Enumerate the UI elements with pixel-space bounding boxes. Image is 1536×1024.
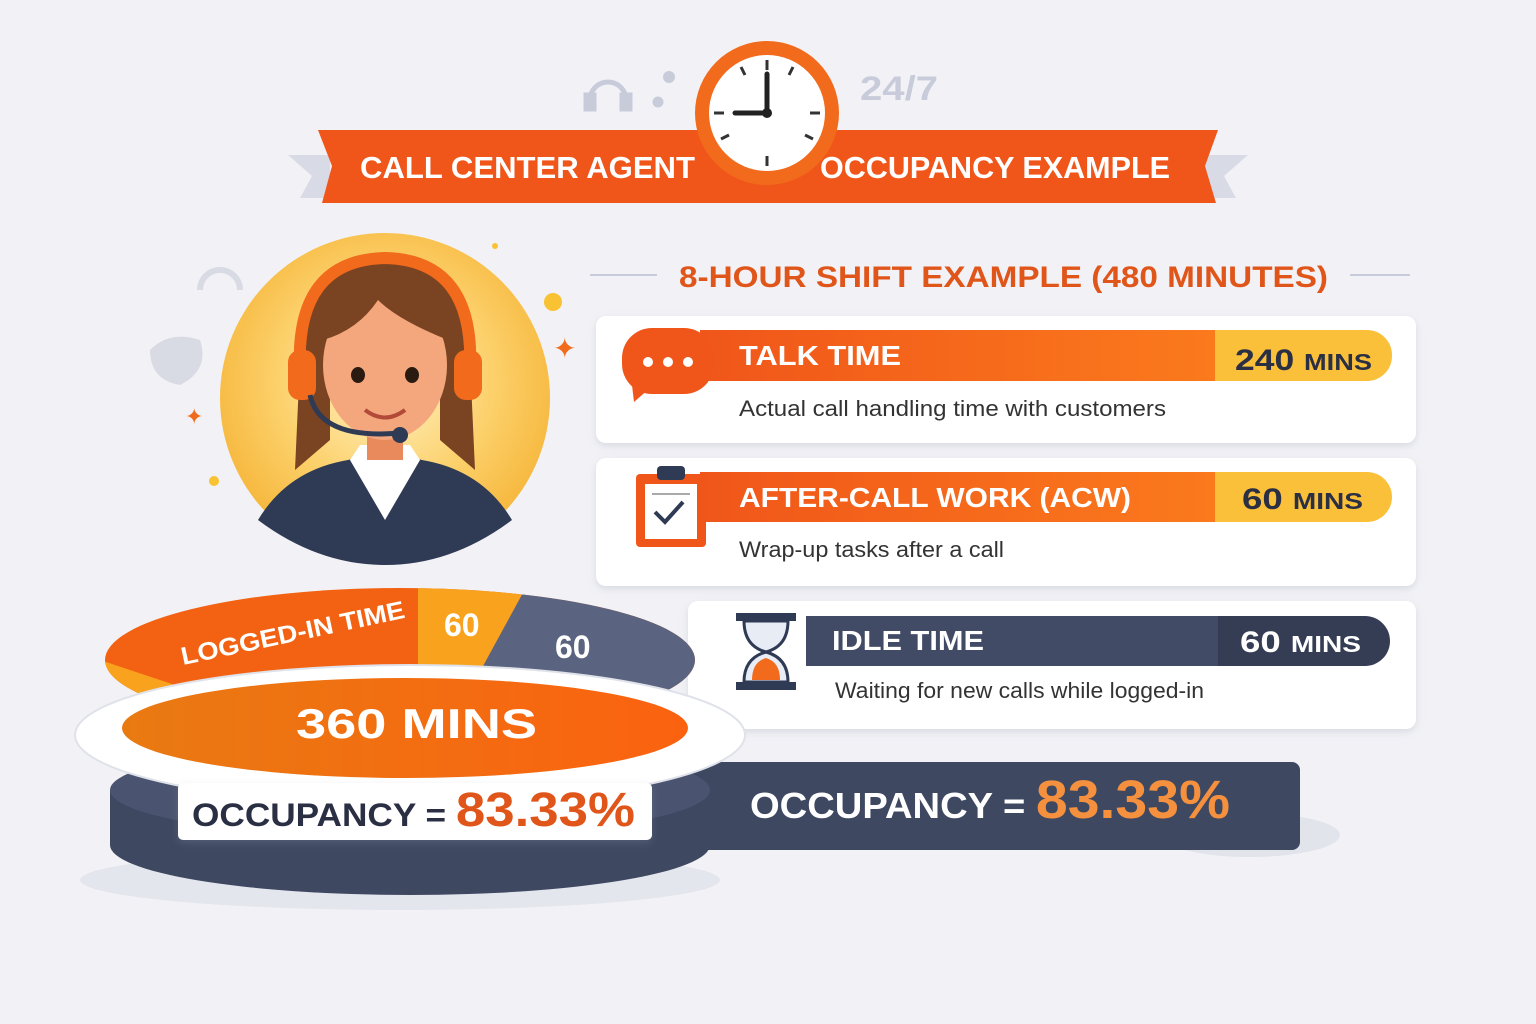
pie chart: logged-in time: 60 [444,607,480,643]
card: idle time: IDLE TIME [832,625,984,656]
pie chart: logged-in time [75,580,745,910]
banner: occupancy result: OCCUPANCY = 83.33% [750,770,1230,830]
card: idle time [688,601,1416,729]
card: after-call work: AFTER-CALL WORK (ACW) [739,482,1131,513]
pie chart: logged-in time: 60 [555,629,591,665]
avatar: agent [150,233,576,565]
card: idle time: 60 MINS [1240,626,1361,659]
title text left: CALL CENTER AGENT [360,150,695,185]
card: after-call work: Wrap-up tasks after a call [739,537,1004,562]
avatar: agent: ✦ [185,404,203,429]
icon: speech bubble [622,328,714,402]
card: talk time [596,316,1416,443]
pie chart: logged-in time: LOGGED-IN TIME [178,596,407,671]
icon: clock [695,41,839,185]
card: after-call work [596,458,1416,586]
text: 24/7: 24/7 [860,70,938,108]
card: after-call work: 60 MINS [1242,483,1363,516]
subtitle: 8-HOUR SHIFT EXAMPLE (480 MINUTES) [679,261,1328,294]
icon: clipboard [636,466,706,547]
label: occupancy: OCCUPANCY = 83.33% [192,784,635,837]
pie chart: logged-in time: 360 MINS [296,700,537,747]
card: idle time: Waiting for new calls while logged-in [835,678,1204,703]
banner: occupancy result [690,762,1340,857]
card: talk time: TALK TIME [739,340,901,371]
icon: hourglass [736,613,796,690]
card: talk time: Actual call handling time with customers [739,396,1166,421]
icon: headset small [586,71,675,109]
card: talk time: 240 MINS [1235,344,1372,377]
title text right: OCCUPANCY EXAMPLE [820,150,1170,185]
avatar: agent: ✦ [553,333,576,364]
title ribbon [288,130,1248,203]
